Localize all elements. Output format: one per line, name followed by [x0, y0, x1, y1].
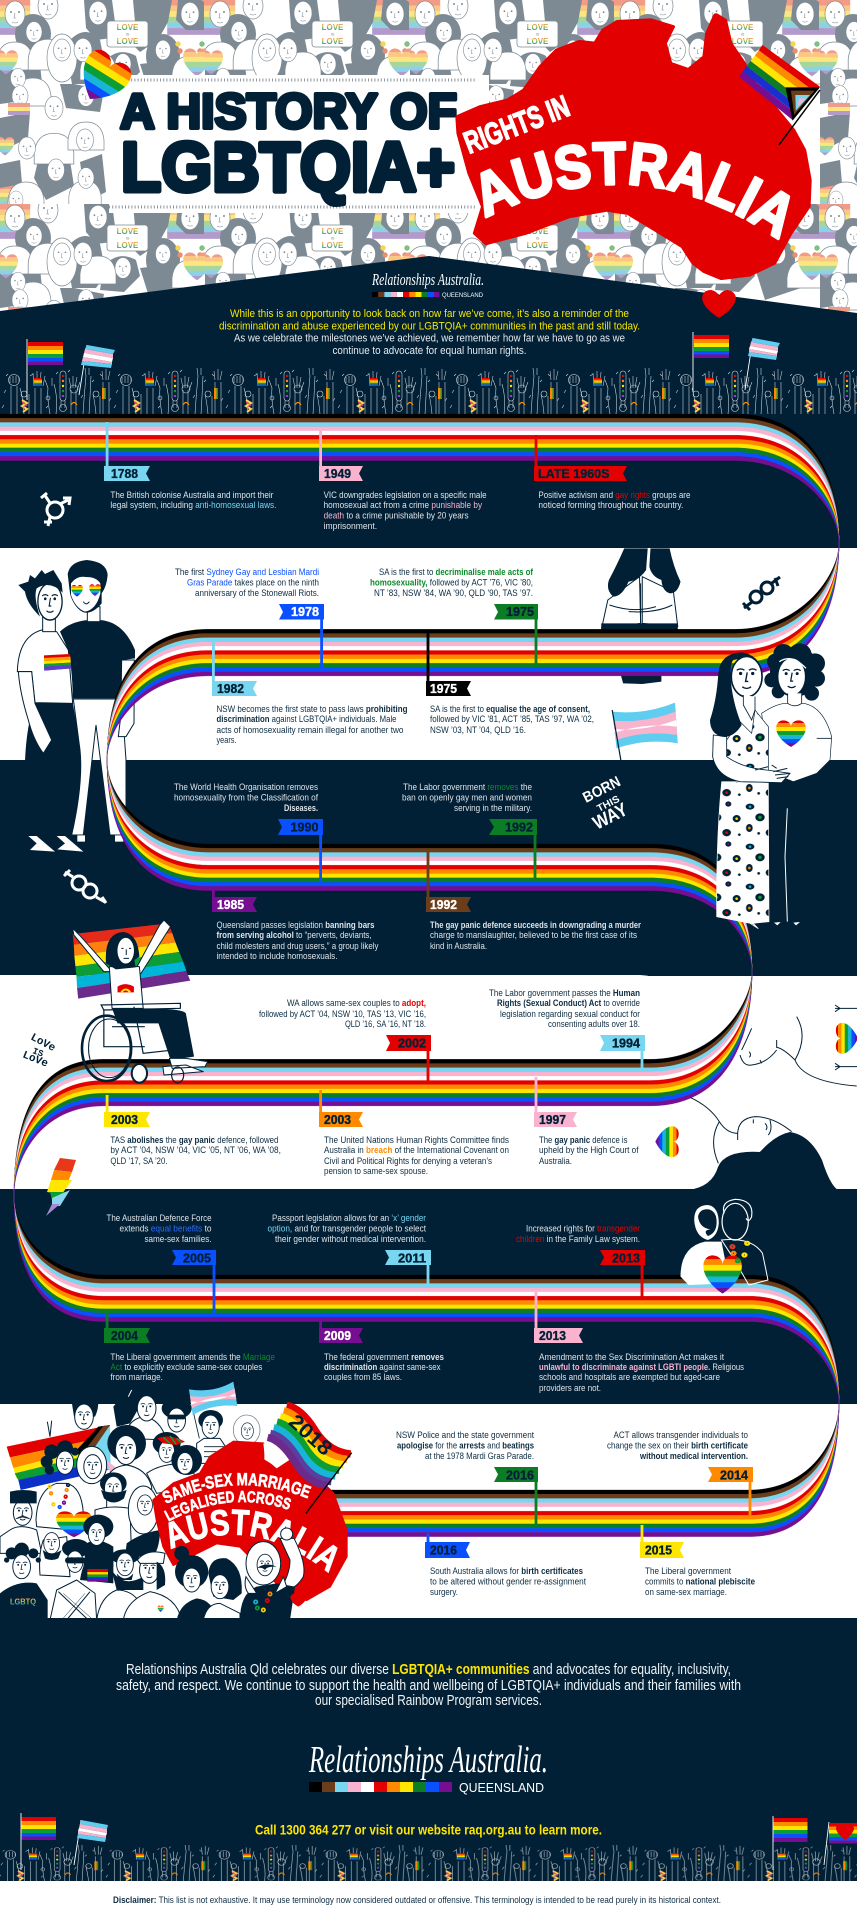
milestone 2002: [259, 998, 431, 1083]
milestone 1985: child molesters and drug users,” a group likely: [216, 941, 379, 951]
milestone 2002: WA allows same-sex couples to adopt,: [287, 998, 426, 1008]
milestone 2011: Passport legislation allows for an ‘x’ gender: [272, 1213, 426, 1223]
milestone 2016 green: apologise for the arrests and beatings: [397, 1440, 534, 1450]
milestone 1975 black: followed by VIC ’81, ACT ’85, TAS ’97, WA ’02,: [430, 714, 594, 724]
hand-lettering: born this way: THIS: [595, 794, 622, 815]
milestone 1975 black: NSW ’03, NT ’04, QLD ’16.: [430, 725, 526, 735]
milestone 2013 pink: providers are not.: [539, 1383, 601, 1393]
timeline ribbon: [0, 414, 839, 1537]
milestone 2013 pink: 2013: [539, 1328, 566, 1343]
flag: rainbow right: [693, 332, 729, 392]
milestone 1978: Gras Parade takes place on the ninth: [187, 578, 319, 588]
milestone 1992 brown: [426, 852, 641, 951]
milestone 1994: 1994: [612, 1036, 641, 1050]
milestone 2003 yellow: [104, 1095, 281, 1166]
milestone 2016 green: [396, 1430, 538, 1526]
illustration: hugging couple from behind: [601, 548, 681, 684]
milestone 1982: discrimination against LGBTQIA+ individuals. Male: [216, 714, 396, 724]
icon: rainbow lightning bolt: [46, 1158, 76, 1216]
milestone 1985: intended to include homosexuals.: [216, 951, 338, 961]
logo: relationships australia footer: Relationships Australia.: [308, 1739, 548, 1781]
milestone 2011: option, and for transgender people to select: [268, 1224, 426, 1234]
milestone 2009: discrimination against same-sex: [324, 1362, 441, 1372]
milestone 2013 red: children in the Family Law system.: [516, 1234, 640, 1244]
raised hands strip bottom: [0, 1845, 857, 1881]
flag: rainbow footer left: [21, 1813, 56, 1870]
milestone 2011: their gender without medical intervention.: [275, 1234, 426, 1244]
milestone 2015: 2015: [645, 1542, 672, 1558]
navy band 2: [0, 760, 857, 976]
milestone 1975 green: SA is the first to decriminalise male acts of: [379, 567, 534, 577]
milestone 1978: 1978: [291, 604, 319, 619]
milestone 1978: [175, 567, 324, 668]
milestone 2005: extends equal benefits to: [120, 1224, 212, 1234]
disclaimer: Disclaimer: This list is not exhaustive. It may use terminology now considered outdated or offensive. This terminology is intended to be read purely in its historical context.: [113, 1895, 721, 1905]
milestone 2003 orange: The United Nations Human Rights Committee finds: [324, 1135, 509, 1145]
logo: relationships australia footer: [308, 1739, 548, 1795]
milestone 1949: imprisonment.: [324, 521, 377, 531]
title line 1: A HISTORY OF: [120, 85, 457, 139]
milestone 2009: The federal government removes: [324, 1352, 444, 1362]
milestone 2009: couples from 85 laws.: [324, 1372, 402, 1382]
milestone 2013 red: [516, 1224, 645, 1298]
milestone 1975 green: [370, 567, 538, 664]
milestone 1982: [212, 639, 408, 745]
milestone late 1960s: Positive activism and gay rights groups are: [538, 490, 690, 500]
illustration: transgender pride flag: [612, 703, 678, 761]
flag: trans right: [745, 338, 780, 390]
milestone 1992 green: serving in the military.: [454, 803, 532, 813]
footer message: safety, and respect. We continue to support the health and wellbeing of LGBTQIA+ individuals and their families with: [116, 1678, 741, 1694]
hand-lettering: born this way: [580, 773, 632, 834]
milestone 1949: [319, 427, 487, 531]
flag: rainbow with heart, far right: [824, 1822, 857, 1865]
milestone 1978: anniversary of the Stonewall Riots.: [195, 588, 319, 598]
intro text: [219, 308, 640, 357]
milestone 1992 green: ban on openly gay men and women: [402, 792, 532, 802]
milestone 1994: The Labor government passes the Human: [489, 988, 640, 998]
milestone 1985: 1985: [217, 897, 244, 912]
milestone 1994: Rights (Sexual Conduct) Act to override: [497, 998, 640, 1008]
raised hands strip top: [0, 368, 857, 414]
milestone 1949: homosexual act from a crime punishable by: [324, 500, 483, 510]
milestone 2016 green: NSW Police and the state government: [396, 1430, 534, 1440]
flag: rainbow left: [27, 339, 63, 400]
milestone 1997: [534, 1077, 639, 1166]
milestone 1975 green: NT ’83, NSW ’84, WA ’90, QLD ’90, TAS ’97.: [374, 588, 533, 598]
milestone 1994: consenting adults over 18.: [548, 1019, 640, 1029]
heading: australia: AUSTRALIA: [480, 141, 790, 240]
milestone 2003 orange: 2003: [324, 1112, 351, 1127]
milestone 2016 blue: surgery.: [430, 1587, 458, 1597]
crowd back row: [47, 1390, 260, 1463]
logo: relationships australia top: Relationships Australia.: [371, 270, 484, 289]
illustration: woman in wheelchair holding rainbow flag: [73, 920, 208, 1083]
milestone 1994: legislation regarding sexual conduct for: [500, 1009, 640, 1019]
milestone 1982: NSW becomes the first state to pass laws prohibiting: [216, 704, 408, 714]
milestone 2004: Act to explicitly exclude same-sex couples: [110, 1362, 263, 1372]
footer message: our specialised Rainbow Program services.: [315, 1693, 542, 1709]
milestone 2014: ACT allows transgender individuals to: [614, 1430, 748, 1440]
milestone 2002: QLD ’16, SA ’16, NT ’18.: [345, 1019, 426, 1029]
milestone 1992 brown: The gay panic defence succeeds in downgrading a murder: [430, 920, 641, 930]
milestone 1992 green: [402, 782, 537, 879]
illustration: gay couple: [17, 560, 135, 852]
hand-lettering: born this way: BORN: [580, 773, 623, 807]
crowd middle row: [0, 1425, 202, 1567]
milestone 1982: years.: [216, 735, 236, 745]
illustration: lying couple: [654, 1005, 857, 1163]
milestone 2003 yellow: 2003: [111, 1112, 138, 1127]
milestone 2004: 2004: [111, 1328, 139, 1343]
milestone 2002: 2002: [398, 1036, 426, 1050]
flag: 2018 rainbow: [268, 1405, 352, 1513]
milestone 1985: Queensland passes legislation banning bars: [216, 920, 374, 930]
milestone 2016 blue: 2016: [430, 1542, 457, 1558]
logo: relationships australia top: [371, 270, 484, 299]
flag: trans left: [79, 345, 115, 395]
milestone 2003 yellow: TAS abolishes the gay panic defence, followed: [110, 1135, 278, 1145]
red map with text: [152, 1440, 348, 1601]
milestone 1788: [104, 422, 276, 510]
milestone 1997: 1997: [539, 1112, 566, 1127]
milestone 1990: [174, 782, 323, 883]
milestone 2004: The Liberal government amends the Marriage: [110, 1352, 275, 1362]
milestone 2013 red: 2013: [612, 1250, 640, 1266]
icon: progress pride flag: [739, 45, 820, 145]
title stitching: [109, 80, 476, 207]
icon: female symbols: [743, 577, 780, 610]
milestone 2014: without medical intervention.: [639, 1451, 748, 1461]
milestone 1992 brown: kind in Australia.: [430, 941, 487, 951]
milestone late 1960s: LATE 1960S: [538, 466, 610, 481]
milestone 1949: death to a crime punishable by 20 years: [324, 510, 469, 520]
milestone 2014: [607, 1430, 753, 1515]
milestone late 1960s: noticed forming throughout the country.: [538, 500, 683, 510]
hair of lying figure: [688, 1132, 838, 1190]
crowd front row: LGBTQ: [10, 1598, 36, 1607]
logo: relationships australia footer: QUEENSLAND: [459, 1780, 544, 1795]
milestone 1994: [489, 988, 645, 1069]
milestone 2015: The Liberal government: [645, 1566, 731, 1576]
crowd front row: [0, 1528, 307, 1620]
milestone 1992 brown: charge to manslaughter, believed to be the first case of its: [430, 930, 637, 940]
milestone 2013 pink: [534, 1292, 744, 1393]
milestone 1997: Australia.: [539, 1156, 572, 1166]
milestone 1985: from serving alcohol to “perverts, deviants,: [216, 930, 372, 940]
milestone late 1960s: [534, 435, 690, 510]
footer message: [116, 1662, 741, 1709]
milestone 2015: commits to national plebiscite: [645, 1576, 755, 1586]
milestone 2002: followed by ACT ’04, NSW ’10, TAS ’13, VIC ’16,: [259, 1009, 426, 1019]
milestone 2014: change the sex on their birth certificate: [607, 1440, 748, 1450]
trans flag in crowd: [189, 1382, 237, 1415]
footer panel: [0, 1618, 857, 1881]
milestone 2003 orange: Australia in breach of the International Covenant on: [324, 1145, 509, 1155]
milestone 1788: 1788: [111, 466, 138, 481]
icon: tasmania heart: [702, 290, 736, 318]
milestone 2005: same-sex families.: [144, 1234, 212, 1244]
call to action: Call 1300 364 277 or visit our website raq.org.au to learn more.: [255, 1822, 602, 1838]
milestone 1975 black: 1975: [430, 681, 457, 696]
title line 2: LGBTQIA+: [121, 128, 455, 206]
milestone 1985: [212, 887, 379, 961]
milestone 1990: The World Health Organisation removes: [174, 782, 318, 792]
red map of Australia: [458, 15, 809, 278]
milestone 1982: acts of homosexuality remain illegal for another two: [216, 725, 404, 735]
red map with text: LEGALISED ACROSS: [164, 1490, 292, 1522]
milestone 1949: VIC downgrades legislation on a specific male: [324, 490, 487, 500]
milestone 1997: upheld by the High Court of: [539, 1145, 639, 1155]
icon: transgender symbol: [41, 493, 70, 526]
footer message: Relationships Australia Qld celebrates our diverse LGBTQIA+ communities and advocates for equality, inclusivity,: [126, 1662, 731, 1678]
milestone 2015: [640, 1525, 755, 1597]
navy roof panel: [0, 256, 857, 548]
title panel: [109, 75, 489, 213]
milestone 1975 green: 1975: [506, 604, 534, 619]
milestone 2003 orange: [319, 1090, 509, 1176]
milestone 2016 blue: South Australia allows for birth certificates: [430, 1566, 583, 1576]
intro text: As we celebrate the milestones we’ve achieved, we remember how far we have to go as we: [234, 332, 625, 344]
milestone 2014: 2014: [720, 1468, 749, 1482]
milestone 1992 green: The Labor government removes the: [403, 782, 532, 792]
milestone 2005: The Australian Defence Force: [106, 1213, 212, 1223]
red map with text: AUSTRALIA: [168, 1509, 338, 1574]
hand-lettering: love is love: [21, 1032, 57, 1071]
intro text: discrimination and abuse experienced by our LGBTQIA+ communities in the past and still today.: [219, 320, 640, 332]
milestone 2015: on same-sex marriage.: [645, 1587, 727, 1597]
milestone 1982: 1982: [217, 681, 244, 696]
flag: rainbow footer right: [773, 1816, 808, 1870]
milestone 2013 pink: unlawful to discriminate against LGBTI people. Religious: [539, 1362, 744, 1372]
milestone 1990: homosexuality from the Classification of: [174, 792, 318, 802]
hand-lettering: born this way: WAY: [590, 799, 632, 834]
navy band 3: [0, 1189, 857, 1404]
milestone 1978: The first Sydney Gay and Lesbian Mardi: [175, 567, 319, 577]
logo: relationships australia top: QUEENSLAND: [442, 293, 484, 299]
milestone 2011: 2011: [398, 1250, 426, 1266]
milestone 2003 yellow: QLD ’17, SA ’20.: [110, 1156, 167, 1166]
progress flag in crowd: [7, 1425, 117, 1490]
milestone 1992 brown: 1992: [430, 897, 457, 912]
milestone 2016 green: 2016: [506, 1468, 534, 1482]
flag: 2018 rainbow: 2018: [284, 1410, 337, 1461]
white band 3 with lying figures silhouette: [0, 975, 857, 1189]
milestone 2016 blue: [425, 1533, 586, 1597]
milestone 2016 blue: to be altered without gender re-assignment: [430, 1576, 586, 1586]
hand-lettering: love is love: LoVe: [28, 1032, 57, 1055]
milestone 2005: 2005: [183, 1250, 211, 1266]
milestone 1975 black: SA is the first to equalise the age of consent,: [430, 704, 590, 714]
milestone 1975 black: [426, 633, 594, 735]
milestone 2013 red: Increased rights for transgender: [526, 1224, 640, 1234]
illustration: couple with heart: [681, 1199, 768, 1296]
milestone 1997: The gay panic defence is: [539, 1135, 628, 1145]
flag: trans footer: [74, 1820, 108, 1865]
milestone 1990: 1990: [290, 820, 318, 834]
milestone 2009: 2009: [324, 1328, 351, 1343]
illustration: same-sex marriage crowd with red map and 2018 flag: [0, 1382, 352, 1618]
milestone 2003 orange: Civil and Political Rights for denying a veteran’s: [324, 1156, 492, 1166]
icon: rainbow heart: [84, 50, 132, 99]
hand-lettering: love is love: LoVe: [21, 1050, 50, 1071]
milestone 1992 green: 1992: [505, 820, 533, 834]
heading: rights in: RIGHTS IN: [459, 88, 574, 161]
intro text: continue to advocate for equal human rights.: [332, 345, 526, 357]
milestone 1788: The British colonise Australia and import their: [110, 490, 273, 500]
icon: male symbols: [64, 870, 106, 903]
milestone 2003 yellow: by ACT ’04, NSW ’04, VIC ’05, NT ’06, WA ’08,: [110, 1145, 281, 1155]
header crowd pattern: [0, 0, 857, 320]
milestone 2003 orange: pension to same-sex spouse.: [324, 1166, 428, 1176]
milestone 2004: from marriage.: [110, 1372, 163, 1382]
milestone 2013 pink: schools and hospitals are exempted but aged-care: [539, 1372, 720, 1382]
milestone 2013 pink: Amendment to the Sex Discrimination Act makes it: [539, 1352, 724, 1362]
milestone 2004: [104, 1312, 275, 1382]
red map with text: SAME-SEX MARRIAGE: [162, 1472, 312, 1504]
illustration: two women embracing: [710, 643, 832, 929]
milestone 2016 green: at the 1978 Mardi Gras Parade.: [425, 1451, 534, 1461]
milestone 1788: legal system, including anti-homosexual laws.: [110, 500, 276, 510]
milestone 2009: [319, 1320, 444, 1382]
milestone 2011: [268, 1213, 431, 1284]
milestone 1990: Diseases.: [284, 803, 318, 813]
milestone 1949: 1949: [324, 466, 351, 481]
intro text: While this is an opportunity to look back on how far we’ve come, it’s also a reminder of the: [230, 308, 629, 320]
hand-lettering: love is love: IS: [31, 1046, 45, 1060]
milestone 1975 green: homosexuality, followed by ACT ’76, VIC ’80,: [370, 578, 533, 588]
milestone 2005: [106, 1213, 216, 1313]
